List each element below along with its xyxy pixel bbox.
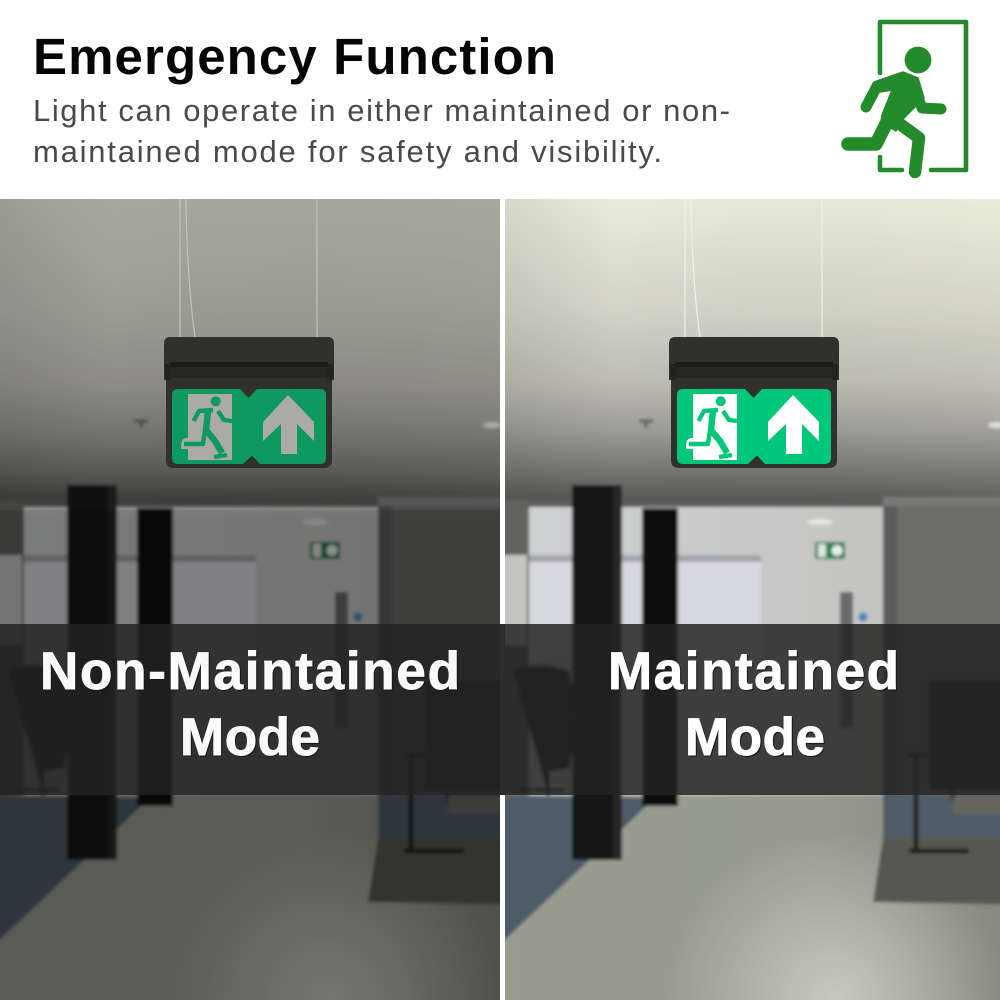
- exit sign, lit: [669, 337, 839, 468]
- label band: [0, 624, 500, 795]
- label: maintained mode: [608, 642, 899, 767]
- description text: Light can operate in either maintained or non-: [33, 93, 730, 128]
- label: maintained mode: Maintained: [608, 642, 899, 701]
- description text: maintained mode for safety and visibility.: [33, 134, 662, 169]
- exit sign, unlit: [164, 337, 334, 468]
- corridor background, bright: [475, 170, 1000, 1000]
- label: non-maintained mode: [43, 650, 458, 757]
- label: non-maintained mode: Non-Maintained: [40, 642, 460, 701]
- panel: maintained mode: [475, 170, 1000, 1000]
- corridor background, dim: [0, 170, 530, 1000]
- header panel: [0, 0, 1000, 199]
- description text: [33, 93, 730, 169]
- label: maintained mode: Mode: [685, 708, 825, 767]
- title: Emergency Function: [33, 28, 556, 85]
- label: non-maintained mode: Mode: [180, 708, 320, 767]
- label band: [500, 624, 1000, 795]
- hanging wires: [180, 199, 317, 337]
- panel: non-maintained mode: [0, 170, 530, 1000]
- hanging wires: [685, 199, 822, 337]
- icon: running person through exit door: [848, 22, 966, 172]
